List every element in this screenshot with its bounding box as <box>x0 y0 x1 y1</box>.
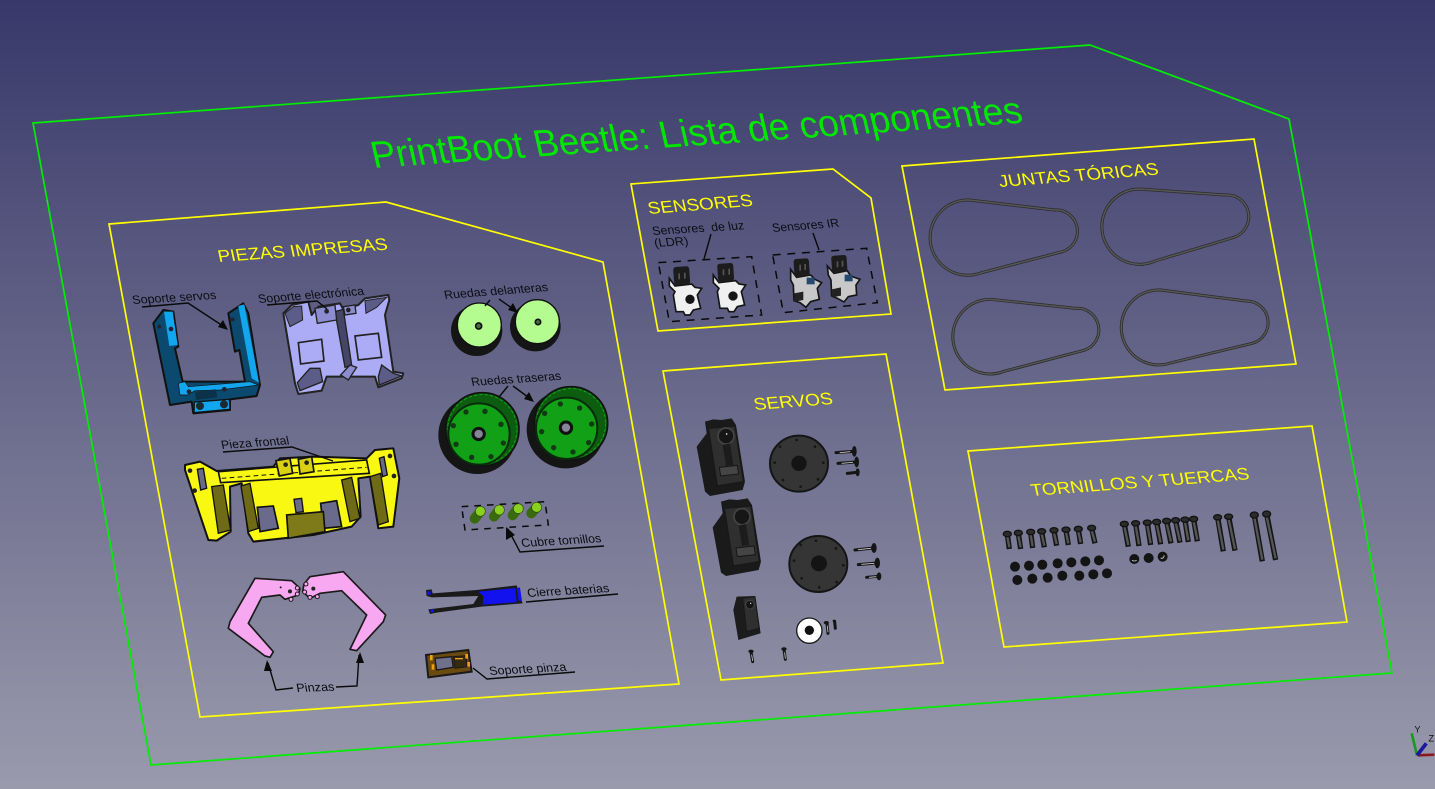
part: ruedas traseras <box>438 387 608 474</box>
part: soporte electronica <box>283 295 403 394</box>
screws <box>1003 511 1276 561</box>
part: pinzas <box>228 572 386 657</box>
label: ruedas delanteras <box>443 280 549 313</box>
label: sensores de luz: (LDR) <box>653 234 690 250</box>
heading: tornillos y tuercas: TORNILLOS Y TUERCAS <box>1029 464 1251 500</box>
sensors IR <box>773 248 877 313</box>
horn screws <box>748 446 881 662</box>
label: sensores de luz <box>651 218 745 259</box>
panel: sensores <box>631 169 891 331</box>
panel: tornillos y tuercas <box>968 426 1347 647</box>
part: ruedas delanteras <box>451 300 561 356</box>
part: cierre baterias <box>426 585 523 614</box>
o-rings <box>930 189 1268 374</box>
heading: piezas impresas: PIEZAS IMPRESAS <box>216 235 389 266</box>
label: cierre baterias: Cierre baterias <box>526 581 610 600</box>
label: ruedas traseras <box>470 369 562 402</box>
icon: axis cross: Z <box>1428 734 1434 744</box>
label: pinzas <box>264 652 364 695</box>
label: pinzas: Pinzas <box>295 680 336 695</box>
label: soporte servos <box>131 288 228 330</box>
title: PrintBoot Beetle: Lista de componentes <box>366 89 1026 177</box>
label: sensores IR: Sensores IR <box>771 216 841 235</box>
label: ruedas delanteras: Ruedas delanteras <box>443 280 549 302</box>
icon: axis cross: Y <box>1414 725 1421 735</box>
label: cubre tornillos: Cubre tornillos <box>520 531 602 550</box>
label: ruedas traseras: Ruedas traseras <box>470 369 562 389</box>
label: soporte pinza: Soporte pinza <box>488 660 568 678</box>
nuts <box>1010 552 1168 585</box>
sensors LDR <box>658 257 762 322</box>
label: pieza frontal: Pieza frontal <box>220 433 290 452</box>
part: soporte servos <box>153 303 260 413</box>
label: pieza frontal <box>220 433 333 461</box>
label: sensores IR <box>771 216 841 250</box>
panel: servos <box>663 354 943 680</box>
part: cubre tornillos <box>462 502 548 530</box>
servo horns <box>770 436 847 643</box>
part: soporte pinza <box>426 650 472 677</box>
panel: piezas impresas <box>109 202 679 717</box>
heading: servos: SERVOS <box>752 389 835 414</box>
panel: juntas toricas <box>902 139 1296 390</box>
heading: juntas toricas: JUNTAS TÓRICAS <box>997 160 1160 191</box>
label: soporte electronica: Soporte electrónica <box>257 284 366 306</box>
label: soporte servos: Soporte servos <box>131 288 217 307</box>
servo motors <box>697 418 761 640</box>
label: sensores de luz: Sensores de luz <box>651 218 745 238</box>
label: cubre tornillos <box>506 527 604 552</box>
icon: axis cross <box>1412 725 1434 755</box>
part: pieza frontal <box>185 448 399 542</box>
heading: sensores: SENSORES <box>646 191 755 218</box>
